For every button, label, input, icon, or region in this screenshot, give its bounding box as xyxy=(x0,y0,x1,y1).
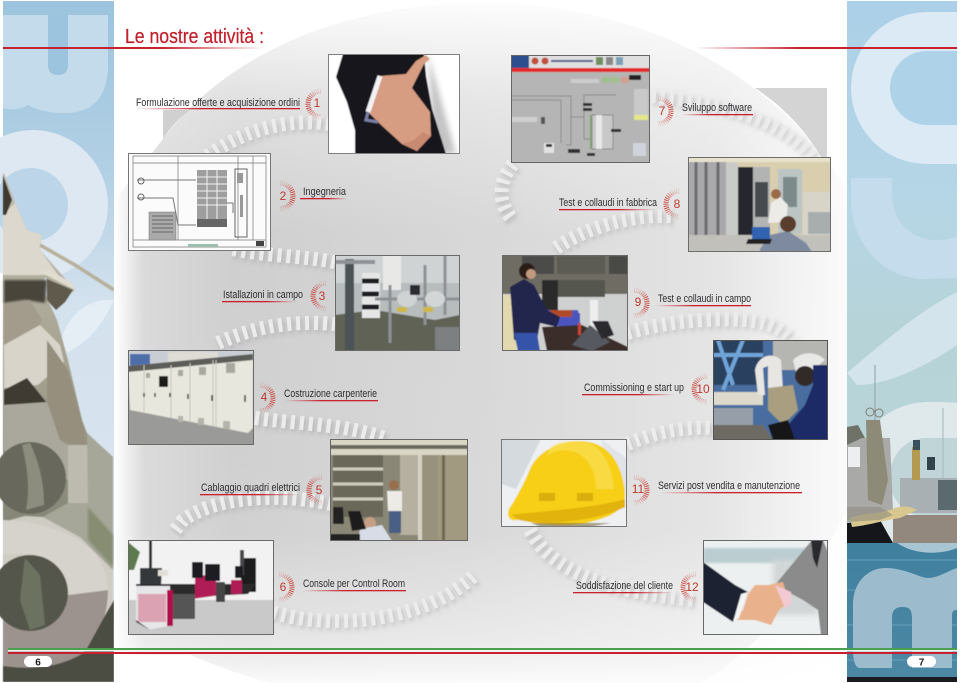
step 10: 10 xyxy=(696,382,710,396)
photo 4: steel enclosures xyxy=(128,350,254,445)
step 2: Ingegneria xyxy=(303,186,346,198)
photo 1: handshake offer xyxy=(328,54,460,154)
step 3: Istallazioni in campo xyxy=(223,289,303,301)
step 4 xyxy=(260,385,378,411)
step 3 xyxy=(222,283,326,309)
left decorative strip with rock photo xyxy=(0,1,114,682)
step 11 xyxy=(632,477,802,503)
top red rule left xyxy=(3,47,265,49)
photo 6: control room console xyxy=(128,540,274,635)
step 12: 12 xyxy=(685,580,699,594)
step 5: 5 xyxy=(316,483,323,497)
step 11: Servizi post vendita e manutenzione xyxy=(658,480,800,492)
step 4: Costruzione carpenterie xyxy=(284,388,377,400)
photo 5: panel wiring xyxy=(330,439,468,541)
step 2: 2 xyxy=(280,189,287,203)
photo 2: engineering drawing xyxy=(128,153,271,251)
step 3: 3 xyxy=(319,289,326,303)
step 1: Formulazione offerte e acquisizione ordini xyxy=(136,97,300,109)
footer tricolour rule xyxy=(8,648,957,654)
step 9 xyxy=(634,290,751,316)
step 5 xyxy=(200,477,323,503)
page number 7 xyxy=(907,656,936,668)
step 11: 11 xyxy=(632,482,645,496)
photo 12: client handshake xyxy=(703,540,828,635)
photo 3: field installations xyxy=(335,255,460,351)
step 8: Test e collaudi in fabbrica xyxy=(559,197,657,209)
step 7: 7 xyxy=(659,104,666,118)
step 9: 9 xyxy=(635,295,642,309)
photo 7: software screen xyxy=(511,55,650,163)
step 1 xyxy=(134,91,321,117)
step 7: Sviluppo software xyxy=(682,102,752,114)
step 6 xyxy=(279,574,406,600)
step 12: Soddisfazione del cliente xyxy=(576,580,673,592)
step 4: 4 xyxy=(261,390,268,404)
photo 10: commissioning xyxy=(713,340,828,440)
top red rule right xyxy=(695,47,957,49)
title: Le nostre attività : xyxy=(125,25,264,48)
step 5: Cablaggio quadri elettrici xyxy=(201,482,300,494)
gear teeth curves xyxy=(172,96,815,621)
step 8 xyxy=(559,191,681,217)
step 10: Commissioning e start up xyxy=(584,382,684,394)
page number 6: 6 xyxy=(35,658,41,668)
step 1: 1 xyxy=(314,96,321,110)
photo 8: factory testing xyxy=(688,157,831,252)
step 2 xyxy=(280,183,347,209)
right decorative strip with harbour photo xyxy=(847,1,957,682)
step 10 xyxy=(582,376,710,402)
step 7 xyxy=(658,98,753,124)
step 12 xyxy=(573,574,699,600)
step 8: 8 xyxy=(674,197,681,211)
page number 6 xyxy=(24,656,52,668)
page number 7: 7 xyxy=(919,658,925,668)
step 9: Test e collaudi in campo xyxy=(658,293,751,305)
step 6: 6 xyxy=(280,580,287,594)
photo 9: field testing xyxy=(502,255,628,351)
photo 11: yellow helmet xyxy=(501,439,627,527)
step 6: Console per Control Room xyxy=(303,578,405,590)
